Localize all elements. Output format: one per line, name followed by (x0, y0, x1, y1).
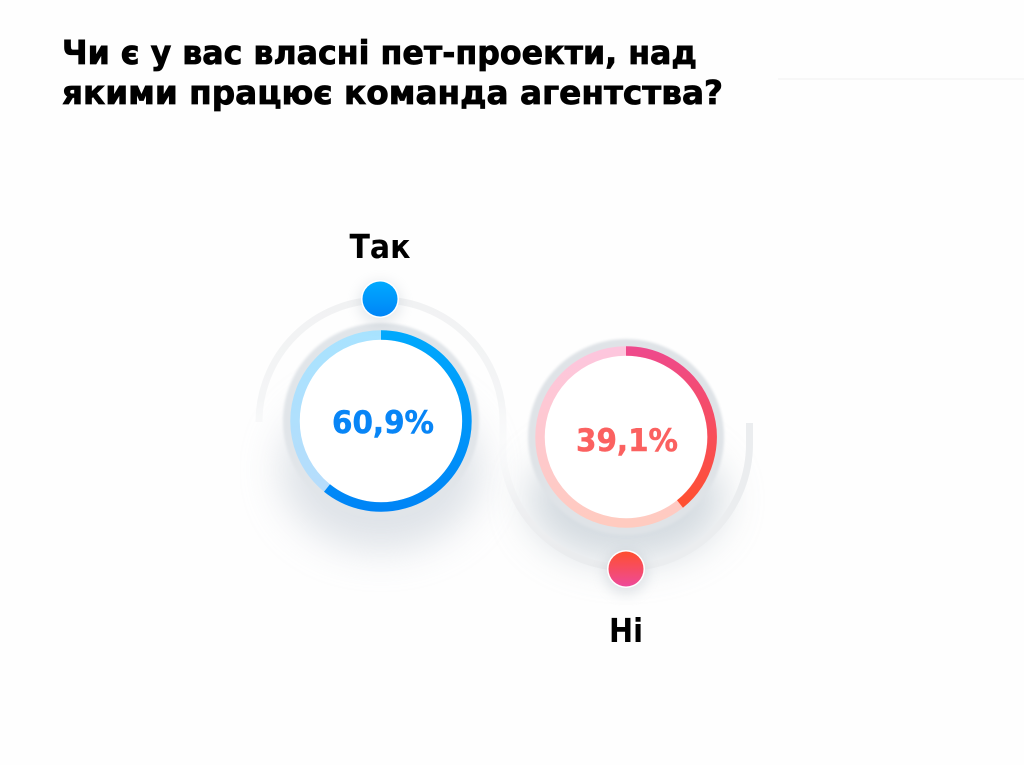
title: Чи є у вас власні пет-проекти, над (62, 33, 697, 72)
chart: Ні 39,1% (502, 339, 750, 650)
label: Ні: Ні (609, 611, 643, 650)
halo ring: Так (283, 323, 479, 519)
progress arc 60,9% (327, 335, 467, 507)
marker dot: Ні (604, 550, 648, 595)
light remainder ring: Так (295, 335, 467, 507)
value: 39,1%: 39,1% (576, 423, 678, 459)
marker dot: Так (358, 280, 402, 325)
chart: Так 60,9% (259, 227, 503, 550)
title (62, 33, 723, 112)
light remainder ring: Ні (540, 351, 712, 523)
value: 60,9%: 60,9% (332, 405, 434, 441)
label: Так: Так (350, 227, 410, 266)
track arc: Так (259, 300, 503, 480)
progress arc 39,1% (626, 351, 712, 504)
title: якими працює команда агентства? (62, 73, 723, 112)
halo ring: Ні (528, 339, 724, 535)
track arc: Ні (502, 423, 750, 568)
